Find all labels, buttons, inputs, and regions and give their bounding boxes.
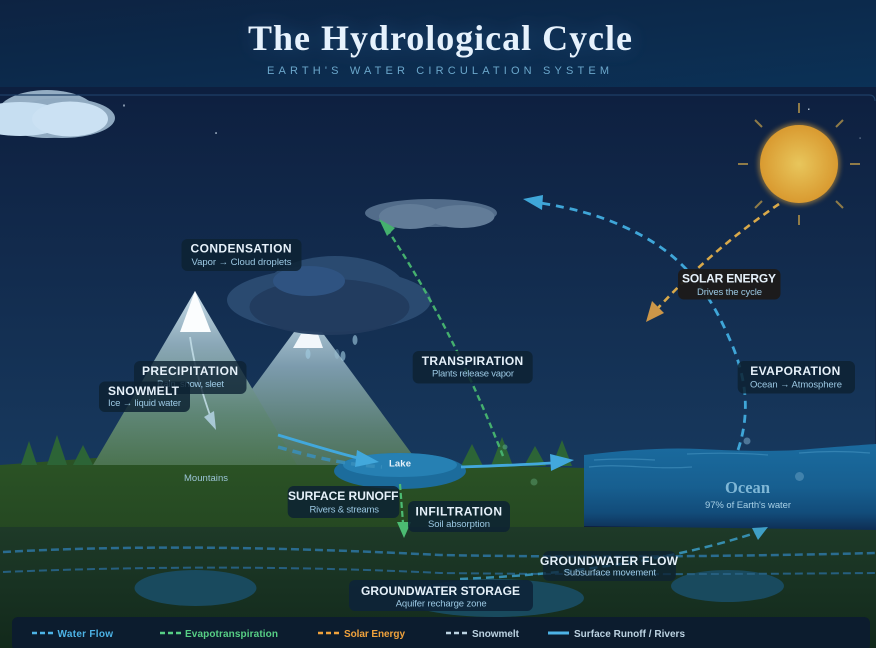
label: snowmelt: SNOWMELT xyxy=(108,384,180,398)
label: transpiration: Plants release vapor xyxy=(432,369,514,380)
ocean wave highlights xyxy=(589,452,870,468)
label: groundwater flow: GROUNDWATER FLOW xyxy=(540,554,679,568)
mountain: rear peak xyxy=(196,313,420,465)
label: snowmelt xyxy=(99,382,190,412)
arrow: transpiration xyxy=(379,219,503,456)
legend: surface runoff and rivers: Surface Runoff / Rivers xyxy=(574,629,685,640)
arrow: lake to ocean xyxy=(461,454,574,471)
label: transpiration: TRANSPIRATION xyxy=(422,354,523,368)
lake label: Lake xyxy=(389,458,411,470)
label: evaporation xyxy=(738,361,855,394)
cloud: top left xyxy=(0,90,115,138)
arrow: solar energy xyxy=(646,204,779,322)
panel top border xyxy=(0,95,875,101)
aquifer: left xyxy=(134,570,256,606)
stars xyxy=(123,104,861,139)
legend: solar energy xyxy=(318,629,405,640)
label: snowmelt: Ice → liquid water xyxy=(108,398,181,409)
panel: sky xyxy=(0,95,876,475)
mountains label: Mountains xyxy=(184,473,228,484)
label: infiltration xyxy=(408,501,510,532)
subtitle: EARTH'S WATER CIRCULATION SYSTEM xyxy=(267,65,609,77)
legend: water flow xyxy=(32,629,113,640)
label: precipitation: PRECIPITATION xyxy=(142,364,238,378)
ocean caption: 97% of Earth's water xyxy=(705,500,791,511)
ocean xyxy=(584,444,876,530)
label: groundwater flow: Subsurface movement xyxy=(564,568,656,579)
arrow: precipitation xyxy=(190,337,216,430)
header band: The Hydrological Cycle xyxy=(248,18,633,58)
label: condensation xyxy=(182,239,302,271)
sun rays xyxy=(738,103,860,225)
aquifer: right xyxy=(671,570,784,602)
label: solar energy xyxy=(678,269,780,300)
trees: left xyxy=(21,435,93,465)
arrow: infiltration xyxy=(397,484,411,538)
label: solar energy: SOLAR ENERGY xyxy=(682,272,776,286)
legend xyxy=(12,617,870,648)
header band xyxy=(0,0,876,87)
land surface xyxy=(0,458,584,530)
label: condensation: Vapor → Cloud droplets xyxy=(192,257,292,268)
label: surface runoff: SURFACE RUNOFF xyxy=(288,489,398,503)
label: groundwater storage: GROUNDWATER STORAGE xyxy=(361,584,520,598)
legend: snowmelt xyxy=(446,629,520,640)
trees: right xyxy=(461,437,572,466)
arrow: surface runoff to lake xyxy=(278,435,379,467)
label: infiltration: Soil absorption xyxy=(428,519,490,530)
legend: evapotranspiration: Evapotranspiration xyxy=(185,629,278,640)
legend: snowmelt: Snowmelt xyxy=(472,629,520,640)
suspended water particles xyxy=(502,438,804,486)
ocean label: Ocean xyxy=(725,478,770,497)
arrow: snowmelt xyxy=(278,447,382,467)
mountain: main peak xyxy=(93,291,297,465)
label: evaporation: Ocean → Atmosphere xyxy=(750,380,842,391)
arrow: evaporation xyxy=(523,195,745,450)
underground soil xyxy=(0,527,876,648)
title: The Hydrological Cycle xyxy=(248,18,632,58)
aquifer: centre xyxy=(404,579,584,617)
storm cloud xyxy=(227,256,431,335)
label: evaporation: EVAPORATION xyxy=(750,364,840,378)
label: infiltration: INFILTRATION xyxy=(416,505,502,519)
label: condensation: CONDENSATION xyxy=(190,242,292,256)
icon: sun xyxy=(738,103,860,225)
label: groundwater storage xyxy=(349,580,533,611)
label: groundwater flow xyxy=(540,551,679,581)
label: surface runoff xyxy=(288,486,399,518)
label: solar energy: Drives the cycle xyxy=(697,287,762,298)
label: groundwater storage: Aquifer recharge zone xyxy=(396,599,487,610)
label: precipitation xyxy=(134,361,246,394)
label: precipitation: Rain, snow, sleet xyxy=(157,379,224,390)
cloud: upper middle xyxy=(365,199,497,229)
arrow: groundwater flow xyxy=(460,527,768,579)
lake xyxy=(334,453,466,489)
legend: water flow: Water Flow xyxy=(58,629,113,640)
rain droplets xyxy=(306,335,358,361)
label: transpiration xyxy=(413,351,533,384)
groundwater dashed lines xyxy=(3,548,876,574)
legend: solar energy: Solar Energy xyxy=(344,629,405,640)
label: surface runoff: Rivers & streams xyxy=(310,504,379,516)
